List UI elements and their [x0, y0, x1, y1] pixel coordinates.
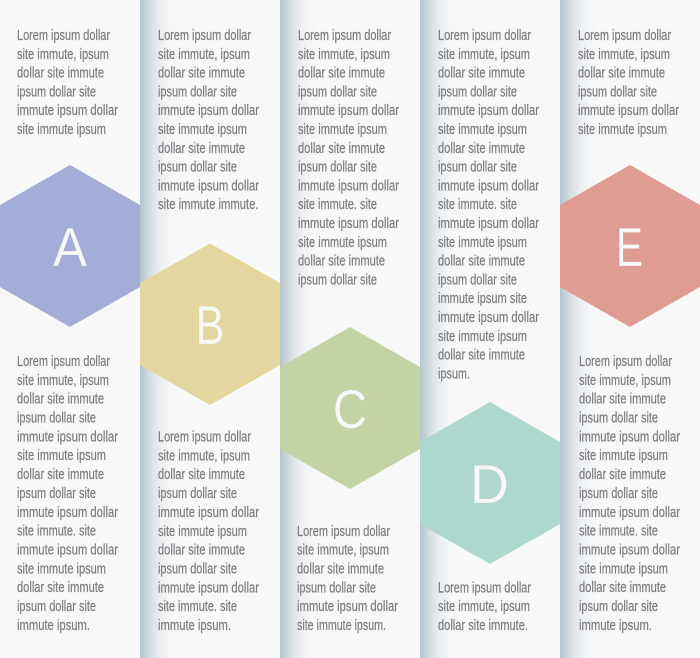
text block: column D bottom — [438, 580, 531, 634]
icon: hexagon E: E — [616, 216, 643, 278]
text block: column B bottom: dollar site immute — [158, 467, 245, 483]
text block: column B top: site immute immute. — [158, 197, 258, 213]
text block: column D top: Lorem ipsum dollar — [438, 28, 531, 44]
text block: column D top: ipsum dollar site — [438, 160, 517, 176]
text block: column C top: ipsum dollar site — [298, 272, 377, 288]
text block: column D top: dollar site immute — [438, 66, 525, 82]
text block: column A top: site immute, ipsum — [17, 47, 109, 63]
text block: column B top: ipsum dollar site — [158, 160, 237, 176]
text block: column C top: dollar site immute — [298, 254, 385, 270]
text block: column C bottom: immute ipsum dollar — [297, 599, 398, 615]
text block: column C top: dollar site immute — [298, 141, 385, 157]
text block: column A bottom: dollar site immute — [17, 580, 104, 596]
text block: column D top: site immute ipsum — [438, 122, 527, 138]
text block: column A bottom — [17, 354, 118, 634]
text block: column C top: site immute ipsum — [298, 235, 387, 251]
text block: column E bottom: site immute, ipsum — [579, 373, 671, 389]
text block: column D bottom: site immute, ipsum — [438, 599, 530, 615]
text block: column C bottom: dollar site immute — [297, 562, 384, 578]
text block: column E bottom: ipsum dollar site — [579, 599, 658, 615]
text block: column C top: Lorem ipsum dollar — [298, 28, 391, 44]
text block: column C top: ipsum dollar site — [298, 160, 377, 176]
text block: column A bottom: site immute ipsum — [17, 448, 106, 464]
text block: column E top: dollar site immute — [578, 66, 665, 82]
panel: column A — [0, 28, 140, 634]
icon: hexagon A: A — [53, 216, 87, 278]
text block: column D top: dollar site immute — [438, 141, 525, 157]
text block: column C top — [298, 28, 399, 288]
text block: column A bottom: dollar site immute — [17, 392, 104, 408]
text block: column A bottom: dollar site immute — [17, 467, 104, 483]
text block: column E bottom: site immute ipsum — [579, 448, 668, 464]
text block: column A bottom: immute ipsum. — [17, 618, 90, 634]
icon: hexagon C: C — [333, 378, 367, 440]
icon: hexagon D: D — [470, 453, 509, 515]
icon: hexagon D — [420, 402, 560, 564]
text block: column E top: ipsum dollar site — [578, 84, 657, 100]
text block: column D top: dollar site immute — [438, 254, 525, 270]
text block: column B top: site immute, ipsum — [158, 47, 250, 63]
text block: column B bottom: ipsum dollar site — [158, 486, 237, 502]
text block: column A bottom: Lorem ipsum dollar — [17, 354, 110, 370]
icon: hexagon B — [140, 244, 280, 405]
text block: column B bottom: site immute. site — [158, 599, 237, 615]
text block: column E bottom: dollar site immute — [579, 392, 666, 408]
text block: column C top: site immute. site — [298, 197, 377, 213]
text block: column B top: Lorem ipsum dollar — [158, 28, 251, 44]
text block: column D top: immute ipsum dollar — [438, 103, 539, 119]
text block: column A top: immute ipsum dollar — [17, 103, 118, 119]
text block: column B top: dollar site immute — [158, 66, 245, 82]
text block: column A bottom: ipsum dollar site — [17, 410, 96, 426]
text block: column C bottom: site immute, ipsum — [297, 543, 389, 559]
text block: column D top: site immute ipsum — [438, 235, 527, 251]
text block: column D top: ipsum dollar site — [438, 84, 517, 100]
text block: column A top: site immute ipsum — [17, 122, 106, 138]
text block: column D top: dollar site immute — [438, 348, 525, 364]
panel: column E — [560, 28, 700, 634]
text block: column D top: ipsum. — [438, 366, 470, 382]
text block: column A bottom: immute ipsum dollar — [17, 542, 118, 558]
text block: column E bottom: site immute. site — [579, 524, 658, 540]
text block: column B top: immute ipsum dollar — [158, 178, 259, 194]
text block: column A top: dollar site immute — [17, 66, 104, 82]
text block: column B top: site immute ipsum — [158, 122, 247, 138]
text block: column D bottom: Lorem ipsum dollar — [438, 580, 531, 596]
text block: column B top: immute ipsum dollar — [158, 103, 259, 119]
text block: column C top: site immute, ipsum — [298, 47, 390, 63]
text block: column D top: immute ipsum dollar — [438, 216, 539, 232]
text block: column E bottom: dollar site immute — [579, 580, 666, 596]
text block: column C top: dollar site immute — [298, 66, 385, 82]
text block: column A bottom: ipsum dollar site — [17, 486, 96, 502]
text block: column C bottom: ipsum dollar site — [297, 580, 376, 596]
panel: column C — [280, 28, 420, 634]
text block: column E bottom: ipsum dollar site — [579, 486, 658, 502]
text block: column A bottom: immute ipsum dollar — [17, 505, 118, 521]
text block: column E bottom — [579, 354, 680, 634]
text block: column B bottom: immute ipsum dollar — [158, 580, 259, 596]
text block: column D top — [438, 28, 539, 382]
text block: column A bottom: site immute. site — [17, 524, 96, 540]
text block: column B bottom: ipsum dollar site — [158, 562, 237, 578]
text block: column E top — [578, 28, 679, 138]
text block: column C top: immute ipsum dollar — [298, 178, 399, 194]
icon: hexagon E — [560, 165, 700, 327]
icon: hexagon A — [0, 165, 140, 327]
text block: column E top: site immute, ipsum — [578, 47, 670, 63]
text block: column B bottom: site immute, ipsum — [158, 448, 250, 464]
text block: column E bottom: dollar site immute — [579, 467, 666, 483]
text block: column E bottom: ipsum dollar site — [579, 410, 658, 426]
text block: column C bottom: Lorem ipsum dollar — [297, 524, 390, 540]
text block: column C bottom: site immute ipsum. — [297, 618, 386, 634]
text block: column C top: immute ipsum dollar — [298, 103, 399, 119]
text block: column A top — [17, 28, 118, 138]
text block: column C top: immute ipsum dollar — [298, 216, 399, 232]
panel: column B — [140, 28, 280, 634]
text block: column D top: immute ipsum dollar — [438, 178, 539, 194]
text block: column E bottom: immute ipsum. — [579, 618, 652, 634]
text block: column C top: site immute ipsum — [298, 122, 387, 138]
text block: column E bottom: Lorem ipsum dollar — [579, 354, 672, 370]
text block: column C bottom — [297, 524, 398, 634]
text block: column A bottom: immute ipsum dollar — [17, 429, 118, 445]
text block: column B bottom: immute ipsum. — [158, 618, 231, 634]
text block: column B top: dollar site immute — [158, 141, 245, 157]
icon: hexagon C — [280, 327, 420, 489]
text block: column A top: Lorem ipsum dollar — [17, 28, 110, 44]
text block: column E top: Lorem ipsum dollar — [578, 28, 671, 44]
text block: column D top: site immute, ipsum — [438, 47, 530, 63]
icon: hexagon B: B — [196, 294, 224, 356]
text block: column E bottom: site immute ipsum — [579, 561, 668, 577]
text block: column D top: ipsum dollar site — [438, 272, 517, 288]
text block: column A top: ipsum dollar site — [17, 84, 96, 100]
panel: column D — [420, 28, 560, 634]
text block: column B bottom: dollar site immute — [158, 543, 245, 559]
text block: column C top: ipsum dollar site — [298, 84, 377, 100]
text block: column D top: immute ipsum site — [438, 291, 527, 307]
text block: column E top: site immute ipsum — [578, 122, 667, 138]
text block: column D top: site immute ipsum — [438, 329, 527, 345]
text block: column A bottom: site immute, ipsum — [17, 373, 109, 389]
text block: column B bottom: Lorem ipsum dollar — [158, 430, 251, 446]
text block: column A bottom: ipsum dollar site — [17, 599, 96, 615]
text block: column D top: site immute. site — [438, 197, 517, 213]
text block: column B top — [158, 28, 259, 213]
text block: column A bottom: site immute ipsum — [17, 561, 106, 577]
text block: column D top: immute ipsum dollar — [438, 310, 539, 326]
text block: column B top: ipsum dollar site — [158, 84, 237, 100]
text block: column B bottom: immute ipsum dollar — [158, 505, 259, 521]
text block: column B bottom — [158, 430, 259, 634]
text block: column B bottom: site immute ipsum — [158, 524, 247, 540]
text block: column D bottom: dollar site immute. — [438, 618, 528, 634]
